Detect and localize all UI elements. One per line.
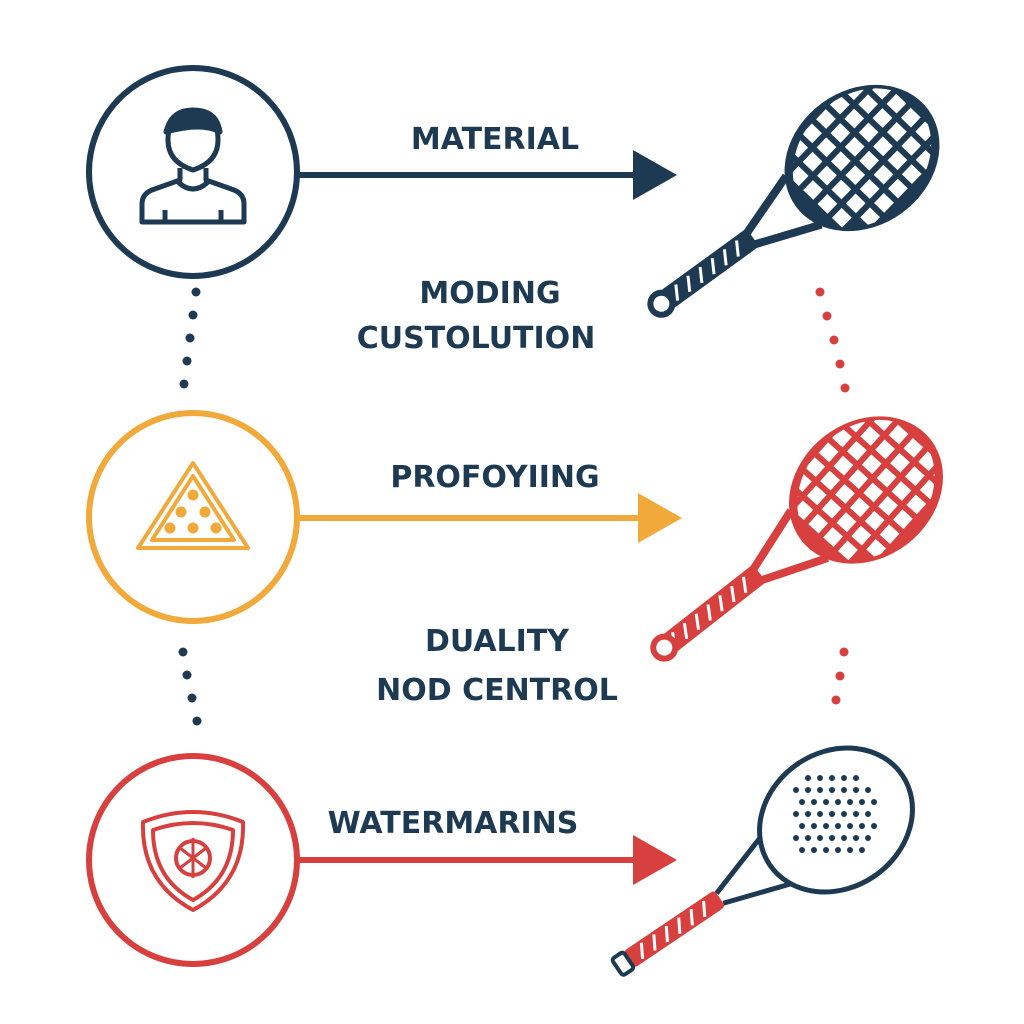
- arrow 1: [298, 150, 677, 200]
- label: DUALITY NOD CENTROL: [376, 624, 618, 708]
- icon: triangle with dots: [138, 463, 248, 548]
- label: WATERMARINS: WATERMARINS: [328, 806, 578, 841]
- label: DUALITY NOD CENTROL: NOD CENTROL: [376, 673, 618, 708]
- step 1 circle: [89, 68, 297, 276]
- label: MODING CUSTOLUTION: MODING: [419, 276, 561, 311]
- label: MODING CUSTOLUTION: CUSTOLUTION: [357, 321, 595, 356]
- label: DUALITY NOD CENTROL: DUALITY: [425, 624, 570, 659]
- dots navy 2: [178, 648, 202, 726]
- icon: person: [142, 110, 244, 222]
- label: MODING CUSTOLUTION: [357, 276, 595, 356]
- dots red 1: [816, 288, 850, 392]
- label: MATERIAL: MATERIAL: [411, 122, 579, 157]
- dots navy 1: [180, 288, 200, 388]
- arrow 3: [298, 835, 677, 885]
- arrow 2: [298, 493, 682, 543]
- racquet 2 red: [650, 416, 943, 662]
- step 2 circle: [89, 413, 297, 621]
- racquet 3 dotted: [610, 746, 915, 977]
- label: PROFOYIING: PROFOYIING: [390, 460, 600, 495]
- racquet 1 navy: [647, 84, 940, 318]
- icon: shield: [143, 812, 243, 910]
- dots red 2: [832, 648, 848, 704]
- step 3 circle: [89, 756, 297, 964]
